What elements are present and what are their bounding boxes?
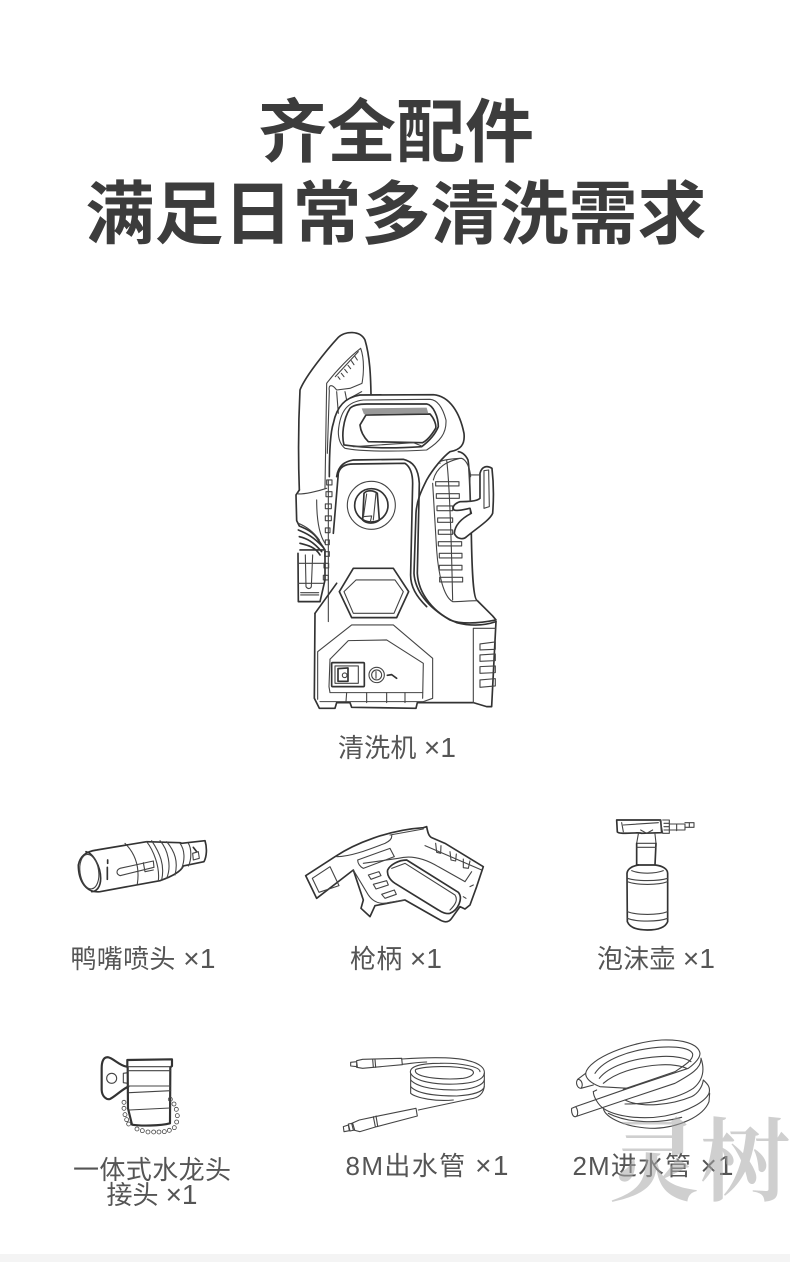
label: gun handle: 枪柄 ×1 [350, 943, 442, 974]
icon: duck-bill nozzle [78, 841, 206, 892]
label: outlet hose: 8M出水管 ×1 [346, 1150, 508, 1181]
watermark [609, 1089, 790, 1219]
label: faucet connector [73, 1155, 231, 1210]
title [86, 94, 706, 253]
label: faucet connector: 接头 ×1 [106, 1179, 198, 1210]
watermark: 树 [700, 1089, 790, 1219]
icon: foam bottle [617, 820, 694, 930]
label: washer: 清洗机 ×1 [338, 732, 456, 763]
icon: 2M inlet hose [572, 1040, 710, 1128]
label: nozzle: 鸭嘴喷头 ×1 [70, 943, 216, 974]
icon: 8M outlet hose [343, 1058, 484, 1132]
label: foam bottle: 泡沫壶 ×1 [597, 943, 715, 974]
icon: pressure washer [296, 333, 496, 708]
label: faucet connector: 一体式水龙头 [73, 1155, 231, 1185]
title: 满足日常多清洗需求 [86, 176, 706, 253]
icon: spray gun handle [306, 827, 483, 922]
title: 齐全配件 [258, 94, 534, 171]
label: inlet hose: 2M进水管 ×1 [572, 1150, 734, 1181]
icon: faucet connector [102, 1057, 179, 1134]
watermark: 灵 [609, 1089, 699, 1219]
